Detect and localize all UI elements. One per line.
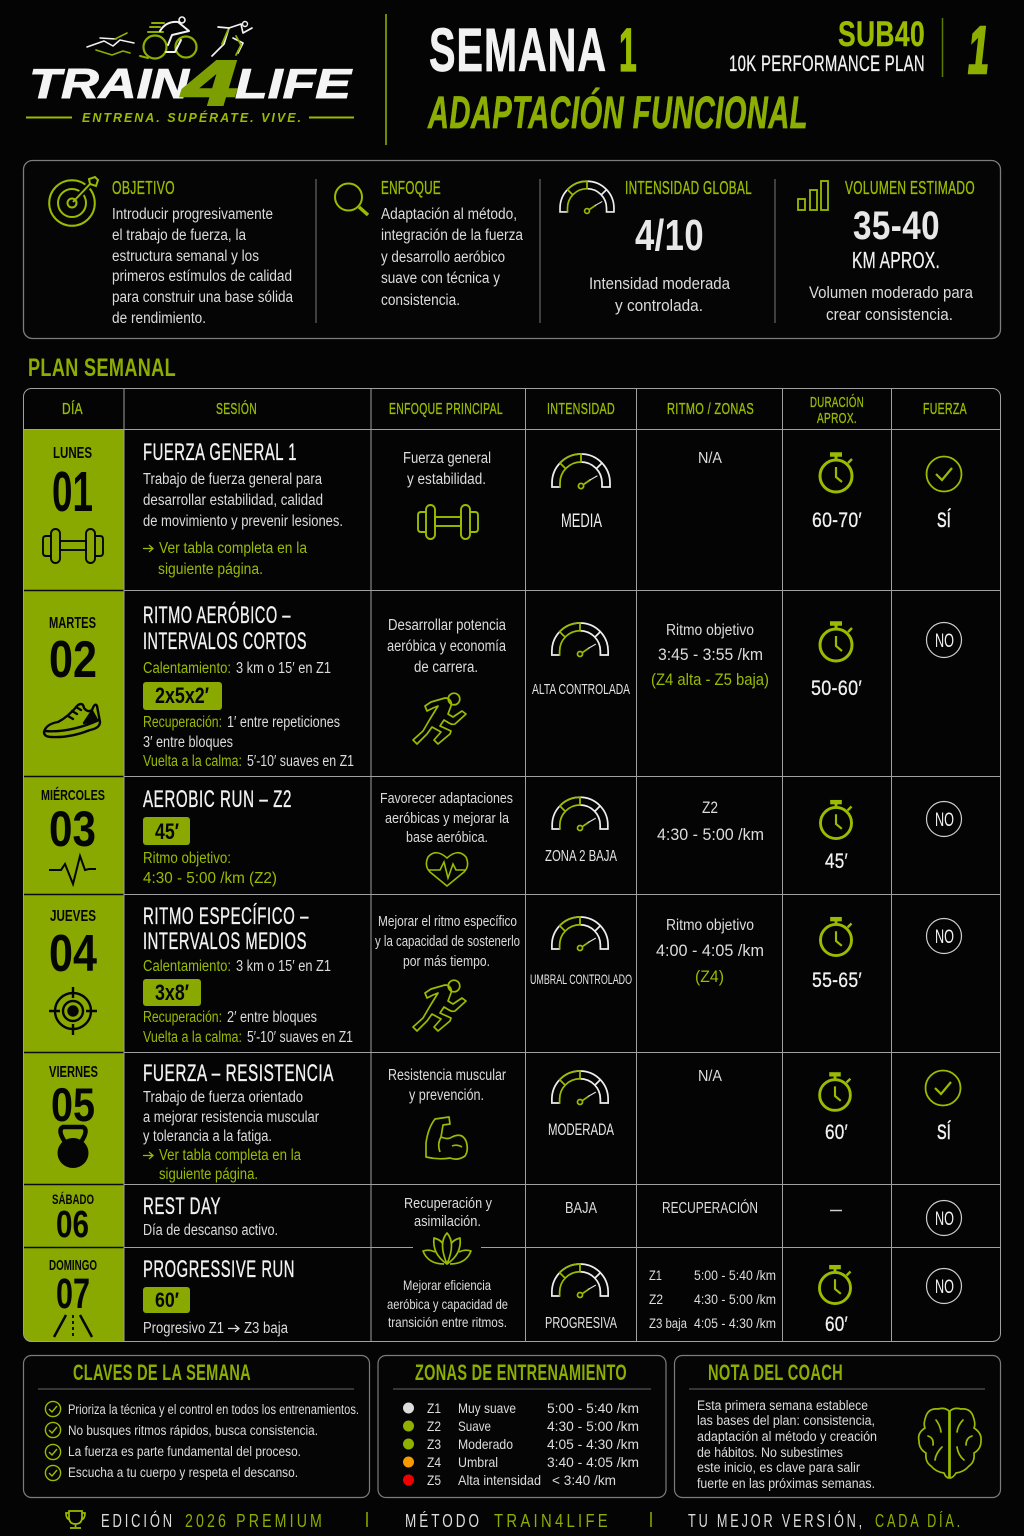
icon: arrow	[143, 1152, 153, 1159]
badge: 3x8	[143, 979, 201, 1006]
coach note text: adaptación al método y creación	[697, 1429, 877, 1444]
day: jueves 04: JUEVES	[50, 908, 96, 925]
plan label: SUB40: SUB40	[838, 15, 925, 54]
enfoque	[381, 178, 523, 309]
focus: potencia aeróbica: de carrera.	[414, 659, 478, 676]
pace: zonas progresivas: Z2	[649, 1292, 663, 1307]
session: fuerza general 1: desarrollar estabilidad, calidad	[143, 492, 323, 509]
heading: zonas: ZONAS DE ENTRENAMIENTO	[415, 1360, 627, 1385]
legend: zones: Alta intensidad	[458, 1472, 541, 1488]
objetivo: OBJETIVO	[112, 178, 175, 198]
logo wordmark: 4	[180, 49, 237, 119]
strength: no	[926, 1200, 962, 1236]
row: domingo	[49, 1256, 962, 1337]
logo wordmark: TRAIN	[29, 60, 191, 107]
day: domingo 07: 07	[56, 1270, 90, 1318]
session: ritmo aeróbico: RITMO AERÓBICO –	[143, 602, 291, 629]
intensidad global: y controlada.	[615, 297, 703, 315]
focus: fuerza general: Fuerza general	[403, 450, 491, 467]
focus: resistencia muscular: y prevención.	[409, 1087, 484, 1104]
icon: heart	[426, 853, 468, 886]
coach note text: este inicio, es clave para salir	[697, 1460, 860, 1475]
day: martes 02	[44, 615, 100, 737]
focus: recuperación: Recuperación y	[404, 1195, 492, 1212]
focus: resistencia muscular	[388, 1067, 506, 1159]
pace: zonas progresivas: Z1	[649, 1268, 662, 1283]
session: fuerza resistencia: y tolerancia a la fatiga.	[143, 1128, 272, 1145]
session: ritmo aeróbico: Vuelta a la calma:	[143, 753, 242, 770]
session: rest day: REST DAY	[143, 1193, 221, 1220]
plan label: SUB40: 10K PERFORMANCE PLAN	[729, 51, 925, 76]
legend: zones: 4:30 - 5:00 /km	[547, 1418, 639, 1434]
session: ritmo aeróbico: Recuperación:	[143, 714, 222, 731]
strength: sí	[926, 456, 962, 532]
objetivo	[112, 178, 293, 327]
focus: fuerza general	[403, 450, 491, 539]
session: ritmo específico: 3 km o 15′ en Z1	[236, 958, 331, 975]
pace: zonas progresivas: 4:30 - 5:00 /km	[694, 1292, 776, 1307]
focus: recuperación	[404, 1195, 492, 1264]
intensity: progresiva: PROGRESIVA	[545, 1315, 617, 1332]
focus: ritmo específico: y la capacidad de sostenerlo	[375, 934, 520, 950]
session: ritmo específico: RITMO ESPECÍFICO –	[143, 903, 309, 930]
pace: ritmo objetivo: 3:45 - 3:55 /km	[658, 645, 763, 664]
session: progressive run: PROGRESSIVE RUN	[143, 1256, 295, 1283]
badge: 45	[143, 817, 190, 845]
icon: running shoe	[44, 704, 100, 737]
intensity: progresiva	[545, 1264, 617, 1332]
icon: intensity gauge	[560, 181, 614, 213]
strength: no	[926, 802, 962, 836]
focus: eficiencia aeróbica	[387, 1277, 508, 1330]
table header row: SESIÓN	[216, 399, 257, 418]
duration: dash	[830, 1210, 842, 1212]
icon: volume bars	[798, 181, 828, 210]
checklist: Prioriza la técnica y el control en todos los entrenamientos.	[68, 1402, 359, 1417]
panel: zonas de entrenamiento	[378, 1356, 666, 1498]
pace: zonas progresivas: Z3 baja	[649, 1316, 687, 1331]
pace: z2	[657, 798, 764, 844]
session: fuerza general 1: FUERZA GENERAL 1	[143, 439, 297, 466]
volumen estimado: 35-40	[853, 204, 940, 248]
focus: adaptaciones aeróbicas	[380, 790, 513, 886]
week number: 1	[968, 13, 989, 88]
session: aerobic run: 4:30 - 5:00 /km (Z2)	[143, 870, 277, 887]
day: sábado 06: 06	[56, 1204, 89, 1246]
session: progressive run: Progresivo Z1	[143, 1320, 224, 1337]
row: martes	[44, 602, 962, 770]
focus: ritmo específico	[375, 914, 520, 1031]
row: lunes	[43, 439, 962, 578]
legend: zones: < 3:40 /km	[552, 1472, 616, 1488]
heading: claves: CLAVES DE LA SEMANA	[73, 1360, 251, 1385]
session: aerobic run	[143, 786, 292, 887]
session: aerobic run: AEROBIC RUN – Z2	[143, 786, 292, 813]
badge: 3x8: 3x8′	[155, 980, 189, 1005]
legend: zones	[403, 1400, 639, 1488]
session: ritmo aeróbico: 1′ entre repeticiones	[227, 714, 340, 731]
pace: ritmo objetivo: Ritmo objetivo	[666, 622, 754, 639]
session: ritmo específico: 2′ entre bloques	[227, 1009, 317, 1026]
badge: 45: 45′	[155, 819, 179, 844]
checklist	[45, 1401, 359, 1481]
table header row: FUERZA	[923, 401, 967, 418]
logo wordmark: LIFE	[235, 60, 354, 107]
pace: ritmo objetivo	[651, 622, 769, 689]
heading: plan semanal: PLAN SEMANAL	[28, 354, 176, 382]
strength: no: NO	[935, 1209, 954, 1230]
strength: sí: SÍ	[937, 509, 951, 532]
day: martes 02: MARTES	[49, 615, 96, 632]
coach note text: de hábitos. No subestimes	[697, 1445, 843, 1460]
duration: 60: 60′	[825, 1313, 848, 1336]
focus: ritmo específico: Mejorar el ritmo específico	[378, 914, 517, 930]
coach note text	[697, 1398, 877, 1491]
icon: magnifier	[335, 184, 368, 215]
session: fuerza resistencia: Trabajo de fuerza orientado	[143, 1089, 303, 1106]
duration: 55-65: 55-65′	[812, 969, 862, 992]
pace: zonas progresivas	[649, 1268, 776, 1331]
panel: nota del coach	[674, 1356, 1000, 1498]
focus: resistencia muscular: Resistencia muscular	[388, 1067, 506, 1084]
pace: N/A: N/A	[698, 450, 723, 467]
legend: zones: 5:00 - 5:40 /km	[547, 1400, 639, 1416]
session: ritmo específico: Recuperación:	[143, 1009, 222, 1026]
session: fuerza resistencia: a mejorar resistencia muscular	[143, 1109, 319, 1126]
strength: no: NO	[935, 1277, 954, 1298]
title: Semana 1: 1	[619, 16, 637, 84]
pace: ritmo objetivo	[656, 917, 764, 986]
day: miércoles 03: MIÉRCOLES	[41, 787, 105, 804]
enfoque: Adaptación al método,	[381, 206, 517, 223]
strength: sí	[926, 1070, 960, 1144]
day: domingo 07	[49, 1257, 97, 1337]
row: sábado	[52, 1191, 962, 1264]
heading: nota: NOTA DEL COACH	[708, 1360, 843, 1385]
session: ritmo específico: Vuelta a la calma:	[143, 1029, 242, 1046]
objetivo: el trabajo de fuerza, la	[112, 227, 246, 244]
session: rest day: Día de descanso activo.	[143, 1222, 278, 1239]
day: viernes 05: VIERNES	[49, 1064, 98, 1081]
day: sábado 06: SÁBADO	[52, 1191, 94, 1207]
intensity: media	[552, 454, 610, 532]
footer strip	[66, 1510, 963, 1531]
checklist: Escucha a tu cuerpo y respeta el descanso.	[68, 1465, 298, 1480]
table header row: ENFOQUE PRINCIPAL	[389, 401, 503, 418]
pace: ritmo objetivo: 4:00 - 4:05 /km	[656, 941, 764, 960]
focus: fuerza general: y estabilidad.	[407, 471, 486, 488]
enfoque: y desarrollo aeróbico	[381, 249, 505, 266]
legend: zones: Muy suave	[458, 1400, 516, 1416]
legend: zones: Umbral	[458, 1454, 498, 1470]
session: ritmo aeróbico: INTERVALOS CORTOS	[143, 628, 307, 655]
duration: 60-70	[812, 454, 862, 532]
icon: road	[54, 1315, 92, 1337]
icon: kettlebell	[58, 1127, 88, 1168]
coach note text: Esta primera semana establece	[697, 1398, 868, 1413]
panel: resumen semanal	[24, 160, 1000, 338]
intensidad global: INTENSIDAD GLOBAL	[625, 178, 752, 198]
footer: tu mejor versión: TU MEJOR VERSIÓN,	[688, 1510, 865, 1531]
logo: Train4Life	[26, 17, 354, 125]
session: progressive run	[143, 1256, 295, 1337]
session: ritmo específico: 5′-10′ suaves en Z1	[247, 1029, 353, 1046]
pace: z2: 4:30 - 5:00 /km	[657, 825, 764, 844]
pace: ritmo objetivo: (Z4 alta - Z5 baja)	[651, 670, 769, 689]
session: ritmo aeróbico: 3 km o 15′ en Z1	[236, 660, 331, 677]
day: miércoles 03	[41, 787, 105, 884]
table header row: INTENSIDAD	[547, 401, 615, 418]
focus: adaptaciones aeróbicas: aeróbicas y mejorar la	[385, 810, 510, 827]
strength: no: NO	[935, 927, 954, 948]
day: domingo 07: DOMINGO	[49, 1257, 97, 1274]
footer: edición	[101, 1510, 325, 1531]
icon: crosshair	[49, 987, 97, 1035]
focus: ritmo específico: por más tiempo.	[403, 954, 490, 970]
day: jueves 04	[49, 908, 97, 1035]
badge: 60	[143, 1287, 190, 1313]
intensity: alta controlada	[532, 623, 630, 698]
duration: 60-70: 60-70′	[812, 509, 862, 532]
footer: método: TRAIN4LIFE	[494, 1511, 611, 1531]
session: ritmo específico	[143, 903, 353, 1046]
duration: 50-60: 50-60′	[811, 677, 862, 700]
session: aerobic run: Ritmo objetivo:	[143, 850, 231, 867]
volumen estimado: crear consistencia.	[826, 306, 953, 324]
day: lunes 01	[43, 445, 103, 563]
strength: no	[926, 918, 962, 954]
footer: tu mejor versión: CADA DÍA.	[875, 1511, 963, 1531]
legend: zones: 4:05 - 4:30 /km	[547, 1436, 639, 1452]
intensity: zona 2 baja	[545, 797, 617, 865]
intensity: baja: BAJA	[565, 1200, 597, 1217]
table header row: DÍA	[62, 399, 83, 418]
icon: pulse	[49, 856, 96, 884]
intensity: umbral controlado: UMBRAL CONTROLADO	[530, 971, 632, 987]
enfoque: suave con técnica y	[381, 270, 500, 287]
intensity: media: MEDIA	[561, 511, 602, 532]
pace: recuperación: RECUPERACIÓN	[662, 1198, 758, 1217]
session: fuerza general 1: Trabajo de fuerza general para	[143, 471, 322, 488]
day: lunes 01: 01	[52, 460, 93, 524]
icon: arrow	[143, 545, 153, 552]
icon: brain	[919, 1408, 981, 1478]
pace: z2: Z2	[702, 798, 718, 817]
table grid	[24, 388, 1000, 1342]
day: miércoles 03: 03	[49, 801, 96, 857]
session: ritmo aeróbico: Calentamiento:	[143, 660, 231, 677]
icon: arrow	[228, 1325, 239, 1332]
intensidad global	[589, 178, 752, 315]
pace: zonas progresivas: 5:00 - 5:40 /km	[694, 1268, 776, 1283]
enfoque: consistencia.	[381, 292, 460, 309]
legend: zones: 3:40 - 4:05 /km	[547, 1454, 639, 1470]
volumen estimado: Volumen moderado para	[809, 284, 974, 302]
pace: zonas progresivas: 4:05 - 4:30 /km	[694, 1316, 776, 1331]
intensity: zona 2 baja: ZONA 2 BAJA	[545, 848, 617, 865]
pace: N/A: N/A	[698, 1068, 723, 1085]
table header row: DURACIÓN	[810, 394, 864, 411]
volumen estimado: KM APROX.	[852, 247, 940, 273]
pace: ritmo objetivo: Ritmo objetivo	[666, 917, 754, 934]
session: fuerza general 1: Ver tabla completa en la	[159, 540, 307, 557]
row: jueves	[49, 903, 962, 1046]
plan label: SUB40	[729, 15, 925, 76]
pace: ritmo objetivo: (Z4)	[695, 967, 724, 986]
session: fuerza resistencia: siguiente página.	[159, 1166, 258, 1183]
objetivo: Introducir progresivamente	[112, 206, 273, 223]
icon: flexed arm	[426, 1117, 467, 1159]
table header row: RITMO / ZONAS	[667, 401, 754, 418]
icon: trophy	[66, 1511, 85, 1528]
table header row: APROX.	[817, 410, 857, 427]
enfoque: ENFOQUE	[381, 178, 441, 198]
legend: zones: Z1	[427, 1400, 441, 1416]
focus: eficiencia aeróbica: transición entre ritmos.	[388, 1314, 507, 1330]
title: Semana 1: SEMANA	[429, 16, 607, 84]
badge: 60: 60′	[155, 1289, 179, 1312]
legend: zones: Z4	[427, 1454, 441, 1470]
session: ritmo aeróbico: 5′-10′ suaves en Z1	[247, 753, 354, 770]
legend: zones: Z5	[427, 1472, 441, 1488]
table header row	[62, 394, 967, 427]
icon: target	[49, 177, 98, 226]
subtitle: Adaptación funcional: ADAPTACIÓN FUNCIONAL	[427, 87, 808, 138]
strength: sí: SÍ	[937, 1121, 951, 1144]
footer: edición: 2026 PREMIUM	[185, 1511, 325, 1531]
session: ritmo aeróbico: 3′ entre bloques	[143, 734, 233, 751]
row: viernes	[49, 1060, 960, 1183]
duration: 45	[820, 802, 852, 873]
day column background	[24, 429, 124, 1342]
session: ritmo específico: Calentamiento:	[143, 958, 231, 975]
session: ritmo aeróbico	[143, 602, 354, 770]
volumen estimado	[809, 178, 975, 324]
intensity: alta controlada: ALTA CONTROLADA	[532, 681, 630, 698]
badge: 2x5x2: 2x5x2′	[155, 683, 209, 708]
duration: 60	[820, 1074, 850, 1144]
panel: claves de la semana	[24, 1356, 370, 1498]
icon: lotus	[423, 1233, 471, 1264]
strength: no	[926, 622, 962, 658]
table: plan semanal	[24, 388, 1000, 1342]
coach note text: las bases del plan: consistencia,	[697, 1413, 875, 1428]
session: ritmo específico: INTERVALOS MEDIOS	[143, 928, 307, 955]
duration: 55-65	[812, 919, 862, 992]
objetivo: de rendimiento.	[112, 310, 206, 327]
logo wordmark	[29, 49, 354, 119]
duration: 45: 45′	[825, 850, 848, 873]
session: progressive run: Z3 baja	[244, 1320, 288, 1337]
session: fuerza general 1	[143, 439, 343, 578]
day: viernes 05	[49, 1064, 98, 1168]
day: lunes 01: LUNES	[53, 445, 92, 462]
focus: eficiencia aeróbica: Mejorar eficiencia	[403, 1277, 491, 1293]
session: fuerza general 1: de movimiento y prevenir lesiones.	[143, 513, 343, 530]
footer: edición: EDICIÓN	[101, 1510, 175, 1531]
checklist: No busques ritmos rápidos, busca consistencia.	[68, 1423, 318, 1438]
checklist: La fuerza es parte fundamental del proceso.	[68, 1444, 301, 1459]
session: rest day	[143, 1193, 278, 1239]
duration: 60: 60′	[825, 1121, 848, 1144]
intensidad global: Intensidad moderada	[589, 275, 731, 293]
session: fuerza resistencia	[143, 1060, 334, 1183]
objetivo: estructura semanal y los	[112, 248, 259, 265]
focus: eficiencia aeróbica: aeróbica y capacidad de	[387, 1296, 508, 1312]
strength: no: NO	[935, 810, 954, 831]
logo tagline: ENTRENA. SUPÉRATE. VIVE.	[82, 110, 303, 125]
footer: método: MÉTODO	[405, 1511, 482, 1531]
icon: triathlon athletes	[87, 17, 252, 58]
focus: adaptaciones aeróbicas: base aeróbica.	[406, 829, 488, 846]
focus: potencia aeróbica: Desarrollar potencia	[388, 617, 506, 634]
session: fuerza resistencia: Ver tabla completa en la	[159, 1147, 301, 1164]
focus: recuperación: asimilación.	[414, 1213, 481, 1230]
intensity: moderada: MODERADA	[548, 1120, 614, 1139]
legend: zones: Z3	[427, 1436, 441, 1452]
day: jueves 04: 04	[49, 925, 97, 983]
legend: zones: Moderado	[458, 1436, 513, 1452]
footer: método	[405, 1511, 611, 1531]
focus: potencia aeróbica: aeróbica y economía	[387, 638, 506, 655]
legend: zones: Z2	[427, 1418, 441, 1434]
intensity: umbral controlado	[530, 917, 632, 987]
row: miércoles	[41, 786, 962, 887]
enfoque: integración de la fuerza	[381, 227, 523, 244]
duration: 50-60	[811, 624, 862, 700]
coach note text: fuerte en las próximas semanas.	[697, 1476, 875, 1491]
legend: zones: Suave	[458, 1418, 491, 1434]
focus: adaptaciones aeróbicas: Favorecer adaptaciones	[380, 790, 513, 807]
intensity: moderada	[548, 1071, 614, 1139]
strength: no: NO	[935, 631, 954, 652]
session: fuerza resistencia: FUERZA – RESISTENCIA	[143, 1060, 334, 1087]
duration: 60	[819, 1267, 851, 1336]
session: fuerza general 1: siguiente página.	[158, 561, 263, 578]
day: viernes 05: 05	[51, 1078, 95, 1131]
day: martes 02: 02	[49, 631, 97, 689]
day: sábado 06	[52, 1191, 94, 1246]
objetivo: primeros estímulos de calidad	[112, 268, 292, 285]
focus: potencia aeróbica	[387, 617, 506, 744]
objetivo: para construir una base sólida	[112, 289, 293, 306]
strength: no	[926, 1268, 962, 1304]
intensidad global: 4/10	[635, 211, 704, 260]
